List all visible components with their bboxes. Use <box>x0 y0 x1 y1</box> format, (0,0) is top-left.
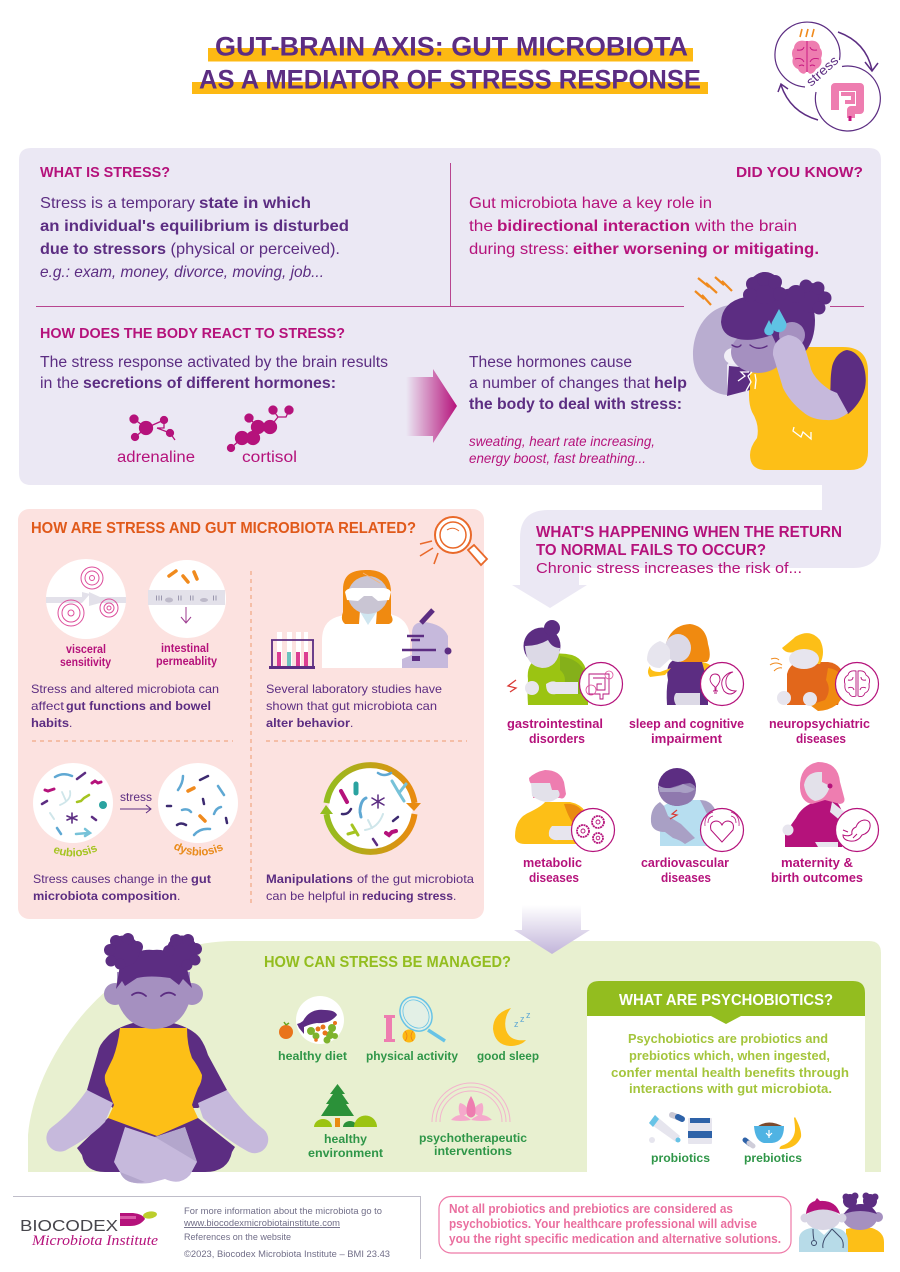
illustration: scientist with microscope <box>269 570 452 669</box>
icon: brain and gut stress loop: stress <box>803 52 842 89</box>
label: intestinal permeability: intestinal <box>161 643 209 655</box>
text: hormone effects: These hormones cause <box>469 354 632 371</box>
label: visceral sensitivity: visceral <box>66 644 106 656</box>
arrow: down to management <box>514 905 590 954</box>
text: manipulations: Manipulations <box>266 872 353 886</box>
references text: References on the website <box>184 1232 291 1243</box>
panel heading: return to normal fails: TO NORMAL FAILS TO OCCUR? <box>536 542 766 559</box>
text: manipulations <box>266 872 474 903</box>
text: hormone effects: a number of changes that <box>469 375 651 392</box>
icon: prebiotics <box>745 1117 801 1149</box>
label: visceral sensitivity <box>60 644 112 669</box>
text: hormone effects: the body to deal with stress: <box>469 396 682 413</box>
fact text: bidirectional interaction <box>497 218 690 235</box>
icon badge: gut <box>580 662 622 706</box>
heading: HOW ARE STRESS AND GUT MICROBIOTA RELATED? <box>31 520 416 537</box>
label: diseases <box>661 871 711 885</box>
icon badge: fetus <box>836 808 878 852</box>
label <box>641 856 729 885</box>
icon: stress arrow: stress <box>120 790 152 804</box>
icon badge: gears <box>572 808 614 852</box>
heading: DID YOU KNOW? <box>736 165 863 181</box>
definition <box>611 1032 849 1096</box>
references text: www.biocodexmicrobiotainstitute.com <box>183 1218 340 1229</box>
text: lab studies: shown that gut microbiota can <box>266 699 437 713</box>
label: metabolic <box>523 856 582 870</box>
label: cortisol: cortisol <box>242 449 297 466</box>
logo <box>20 1211 158 1249</box>
text: gut functions <box>31 682 219 730</box>
label: healthy environment: healthy <box>324 1132 367 1146</box>
label: prebiotics: prebiotics <box>744 1151 802 1165</box>
title: GUT-BRAIN AXIS: GUT MICROBIOTA <box>215 32 688 62</box>
icon: intestinal permeability <box>148 560 226 638</box>
fact text: during stress: <box>469 241 569 258</box>
icon: healthy diet <box>279 996 344 1044</box>
text: manipulations: . <box>453 889 456 903</box>
text: manipulations: of the gut microbiota <box>357 872 474 886</box>
label: psychotherapeutic interventions: psychotherapeutic <box>419 1131 527 1145</box>
fact text <box>469 195 819 258</box>
text: gut functions: habits <box>31 716 69 730</box>
panel: how are stress and gut microbiota related <box>18 509 488 919</box>
label: intestinal permeability <box>156 643 218 668</box>
illustration: meditating woman <box>46 933 268 1184</box>
icon: good sleep <box>493 1008 531 1046</box>
label: psychotherapeutic interventions: interventions <box>434 1144 512 1158</box>
text: gut functions: . <box>69 716 72 730</box>
person: cardiovascular diseases <box>641 768 744 885</box>
icon: adrenaline molecule <box>130 415 175 440</box>
label: psychotherapeutic interventions <box>419 1131 527 1158</box>
label: cardiovascular <box>641 856 729 870</box>
text: symptoms: sweating, heart rate increasing, <box>469 433 655 449</box>
text: hormones <box>40 354 388 392</box>
callout: not all probiotics <box>439 1196 791 1253</box>
panel heading: return to normal fails <box>536 524 842 577</box>
label: adrenaline: adrenaline <box>117 449 195 466</box>
icon: brain and gut stress loop <box>775 22 880 131</box>
text: composition <box>33 872 211 903</box>
icon: cortisol molecule <box>228 406 293 452</box>
text: manipulations: reducing stress <box>362 889 453 903</box>
arrow <box>406 369 457 443</box>
text: composition: microbiota composition <box>33 889 177 903</box>
label <box>507 717 603 746</box>
icon: stress arrow <box>120 790 152 813</box>
text: hormones: in the <box>40 375 79 392</box>
person: sleep and cognitive impairment <box>629 624 744 746</box>
text: composition: . <box>177 889 180 903</box>
heading: WHAT IS STRESS? <box>40 165 170 181</box>
definition: prebiotics which, when ingested, <box>629 1049 830 1063</box>
text: hormones: The stress response activated by the brain results <box>40 354 388 371</box>
icon: probiotics <box>649 1115 712 1144</box>
definition text: state in which <box>199 195 311 212</box>
label: healthy environment <box>308 1132 383 1160</box>
definition: Psychobiotics are probiotics and <box>628 1032 828 1046</box>
person: neuropsychiatric diseases <box>769 633 878 746</box>
panel: how does the body react <box>40 326 687 466</box>
definition: interactions with gut microbiota. <box>629 1082 832 1096</box>
definition text: e.g.: exam, money, divorce, moving, job... <box>40 264 324 281</box>
references text: For more information about the microbiota go to <box>184 1206 382 1217</box>
definition text: an individual's equilibrium is disturbed <box>40 218 349 235</box>
panel: stress background with return-to-normal flow arrow <box>19 148 881 608</box>
text: hormone effects <box>469 354 687 413</box>
definition text: due to stressors <box>40 241 166 258</box>
panel: how can stress be managed <box>28 905 881 1172</box>
fact text: either worsening or mitigating. <box>573 241 819 258</box>
text: lab studies: Several laboratory studies have <box>266 682 442 696</box>
panel heading: return to normal fails: WHAT'S HAPPENING WHEN THE RETURN <box>536 524 842 541</box>
definition text: (physical or perceived). <box>170 241 340 258</box>
icon: visceral sensitivity <box>46 559 126 639</box>
icon badge: bulb and moon <box>700 662 744 706</box>
icon: good sleep: z <box>526 1010 531 1020</box>
text: hormone effects: help <box>654 375 687 392</box>
label: impairment <box>651 732 723 746</box>
logo: Microbiota Institute <box>31 1233 158 1249</box>
text: hormones: secretions of different hormones: <box>83 375 336 392</box>
label: visceral sensitivity: sensitivity <box>60 657 112 669</box>
heading: HOW DOES THE BODY REACT TO STRESS? <box>40 326 345 342</box>
label: good sleep: good sleep <box>477 1049 539 1063</box>
fact text: the <box>469 218 493 235</box>
text: symptoms: energy boost, fast breathing... <box>469 450 646 466</box>
footer: logo and references <box>13 1196 420 1260</box>
heading: WHAT ARE PSYCHOBIOTICS? <box>619 992 833 1009</box>
definition text: Stress is a temporary <box>40 195 195 212</box>
icon: microbiota cycle <box>320 765 421 852</box>
text: gut functions: Stress and altered microbiota can <box>31 682 219 696</box>
title: AS A MEDIATOR OF STRESS RESPONSE <box>199 64 701 94</box>
definition text <box>40 195 349 281</box>
text: manipulations: can be helpful in <box>266 889 359 903</box>
icon: healthy environment <box>314 1084 377 1127</box>
label <box>771 856 863 885</box>
illustration: doctor and patient <box>799 1192 884 1252</box>
illustration: stressed woman <box>693 272 868 470</box>
icon: psychotherapeutic interventions <box>432 1083 510 1122</box>
label: birth outcomes <box>771 871 863 885</box>
label <box>629 717 744 746</box>
text: lab studies: . <box>350 716 353 730</box>
label: disorders <box>529 732 585 746</box>
panel heading: return to normal fails: Chronic stress increases the risk of... <box>536 560 802 577</box>
panel: what is stress <box>40 165 349 281</box>
icon: physical activity <box>384 991 445 1042</box>
label: diseases <box>529 871 579 885</box>
callout: not all probiotics: psychobiotics. Your healthcare professional will advise <box>449 1217 757 1231</box>
label: diseases <box>796 732 846 746</box>
person: metabolic diseases <box>515 770 614 885</box>
label: healthy environment: environment <box>308 1146 383 1160</box>
panel: what are psychobiotics <box>587 981 865 1172</box>
definition: confer mental health benefits through <box>611 1066 849 1080</box>
icon badge: brain <box>836 662 878 706</box>
label: dysbiosis: dysbiosis <box>174 843 223 856</box>
fact text: with the brain <box>694 218 797 235</box>
label: maternity & <box>781 856 853 870</box>
label <box>523 856 582 885</box>
label: probiotics: probiotics <box>651 1151 710 1165</box>
text: composition: Stress causes change in the <box>33 872 188 886</box>
references text <box>183 1206 390 1260</box>
label: neuropsychiatric <box>769 717 870 731</box>
text: composition: gut <box>191 872 211 886</box>
icon: eubiosis microbes <box>33 763 113 843</box>
text: gut functions: gut functions and bowel <box>66 699 211 713</box>
icon: good sleep: z <box>520 1014 525 1024</box>
logo: BIOCODEX <box>20 1218 118 1235</box>
icon: good sleep: z <box>514 1019 519 1029</box>
label: gastrointestinal <box>507 717 603 731</box>
person: gastrointestinal disorders <box>507 620 622 746</box>
person: maternity and birth outcomes <box>771 762 878 885</box>
label: healthy diet: healthy diet <box>278 1049 347 1063</box>
callout: not all probiotics: you the right specific medication and alternative solutions. <box>449 1232 781 1246</box>
icon: dysbiosis microbes <box>158 763 238 843</box>
icon: magnifying glass <box>420 517 487 565</box>
label: eubiosis: eubiosis <box>54 846 97 856</box>
callout: not all probiotics: Not all probiotics and prebiotics are considered as <box>449 1202 733 1216</box>
heading: HOW CAN STRESS BE MANAGED? <box>264 954 511 971</box>
fact text: Gut microbiota have a key role in <box>469 195 712 212</box>
label: physical activity: physical activity <box>366 1049 458 1063</box>
label: intestinal permeability: permeablity <box>156 656 218 668</box>
references text: ©2023, Biocodex Microbiota Institute – BMI 23.43 <box>184 1249 390 1260</box>
icon badge: heart <box>700 808 744 852</box>
text: lab studies <box>266 682 442 730</box>
text: lab studies: alter behavior <box>266 716 350 730</box>
label <box>769 717 870 746</box>
text: symptoms <box>469 433 655 466</box>
label: sleep and cognitive <box>629 717 744 731</box>
panel: did you know <box>469 165 863 258</box>
title <box>192 32 708 94</box>
text: gut functions: affect <box>31 699 65 713</box>
